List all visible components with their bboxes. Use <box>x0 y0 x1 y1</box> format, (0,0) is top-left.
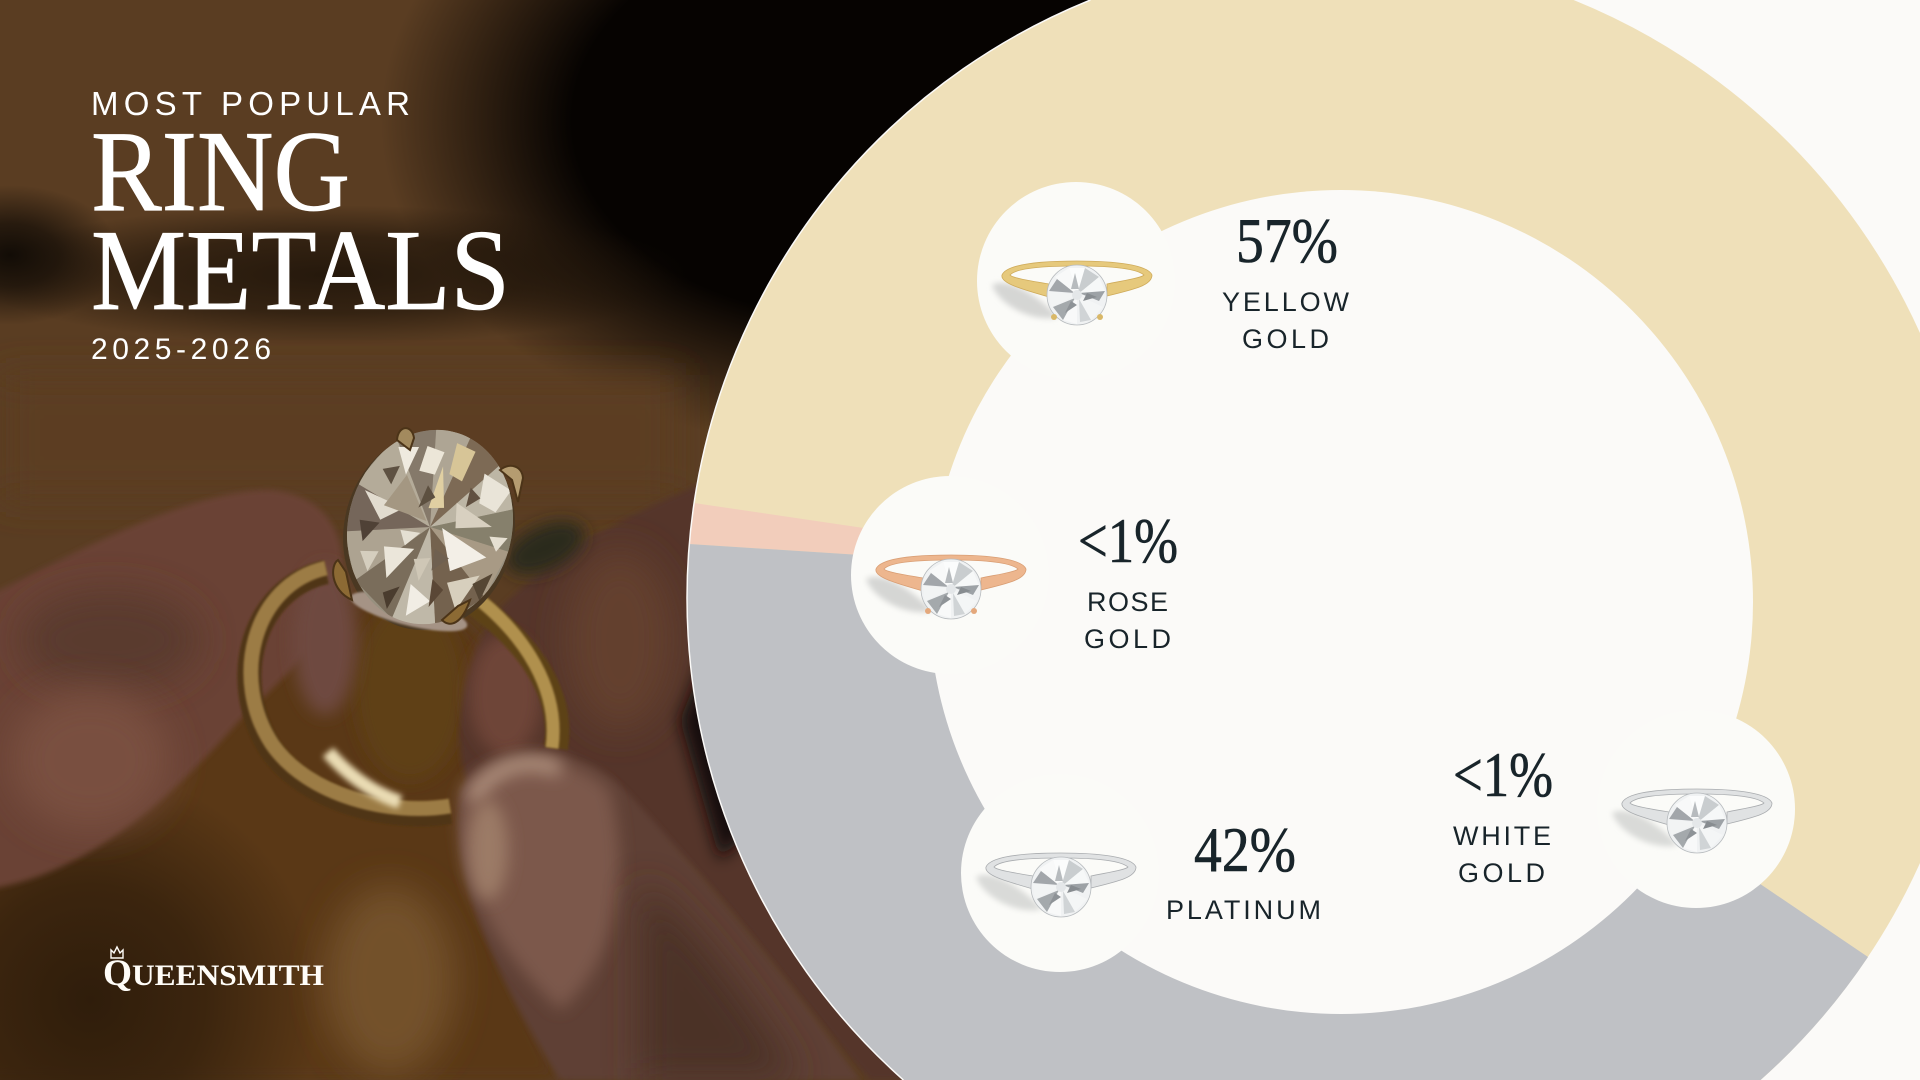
heading: most popular: MOST POPULAR <box>91 85 410 122</box>
background photo: hand holding oval diamond ring <box>0 0 1088 1080</box>
inner white circle <box>929 190 1753 1014</box>
right page background <box>1330 0 1920 1080</box>
heading: metals: METALS <box>91 207 510 335</box>
callout: yellow gold bubble and ring <box>977 182 1175 380</box>
right finger <box>459 490 897 1076</box>
diamond <box>343 430 515 633</box>
label: 42% platinum: 42% <box>1194 815 1296 885</box>
label: under 1% white gold: <1% <box>1453 740 1553 810</box>
gold ring band <box>249 568 557 814</box>
label: under 1% white gold: WHITE <box>1453 821 1551 851</box>
heading: ring: RING <box>91 108 350 236</box>
subtitle: years: 2025-2026 <box>91 333 271 366</box>
label: 57% yellow gold: 57% <box>1236 206 1338 276</box>
label: 57% yellow gold: GOLD <box>1242 324 1329 354</box>
logo: Queensmith: Q <box>103 953 132 994</box>
label: 42% platinum <box>1166 815 1321 925</box>
label: 57% yellow gold: YELLOW <box>1222 287 1350 317</box>
callout: white gold bubble and ring <box>1597 710 1795 908</box>
label: under 1% rose gold: <1% <box>1078 506 1178 576</box>
title block <box>91 85 510 366</box>
label: under 1% white gold: GOLD <box>1458 858 1545 888</box>
segment: yellow gold 57% <box>687 0 1920 1080</box>
label: under 1% white gold <box>1453 740 1553 888</box>
callout: rose gold bubble and ring <box>851 476 1049 674</box>
label: 57% yellow gold <box>1222 206 1350 354</box>
donut chart: ring metal share <box>687 0 1920 1080</box>
left finger <box>0 490 342 890</box>
logo: Queensmith: UEENSMITH <box>132 959 324 992</box>
label: under 1% rose gold <box>1078 506 1178 654</box>
logo: Queensmith <box>103 947 324 994</box>
segment: platinum 42% and white gold under 1% <box>687 544 1868 1080</box>
label: under 1% rose gold: GOLD <box>1084 624 1171 654</box>
thumb <box>459 752 860 1080</box>
label: under 1% rose gold: ROSE <box>1087 587 1168 617</box>
donut outer edge <box>687 0 1090 1080</box>
diamond prongs <box>333 428 523 624</box>
label: 42% platinum: PLATINUM <box>1166 895 1321 925</box>
lower wood knob <box>154 610 551 1078</box>
segment: rose gold under 1% <box>689 503 1000 564</box>
callout: platinum bubble and ring <box>961 774 1159 972</box>
